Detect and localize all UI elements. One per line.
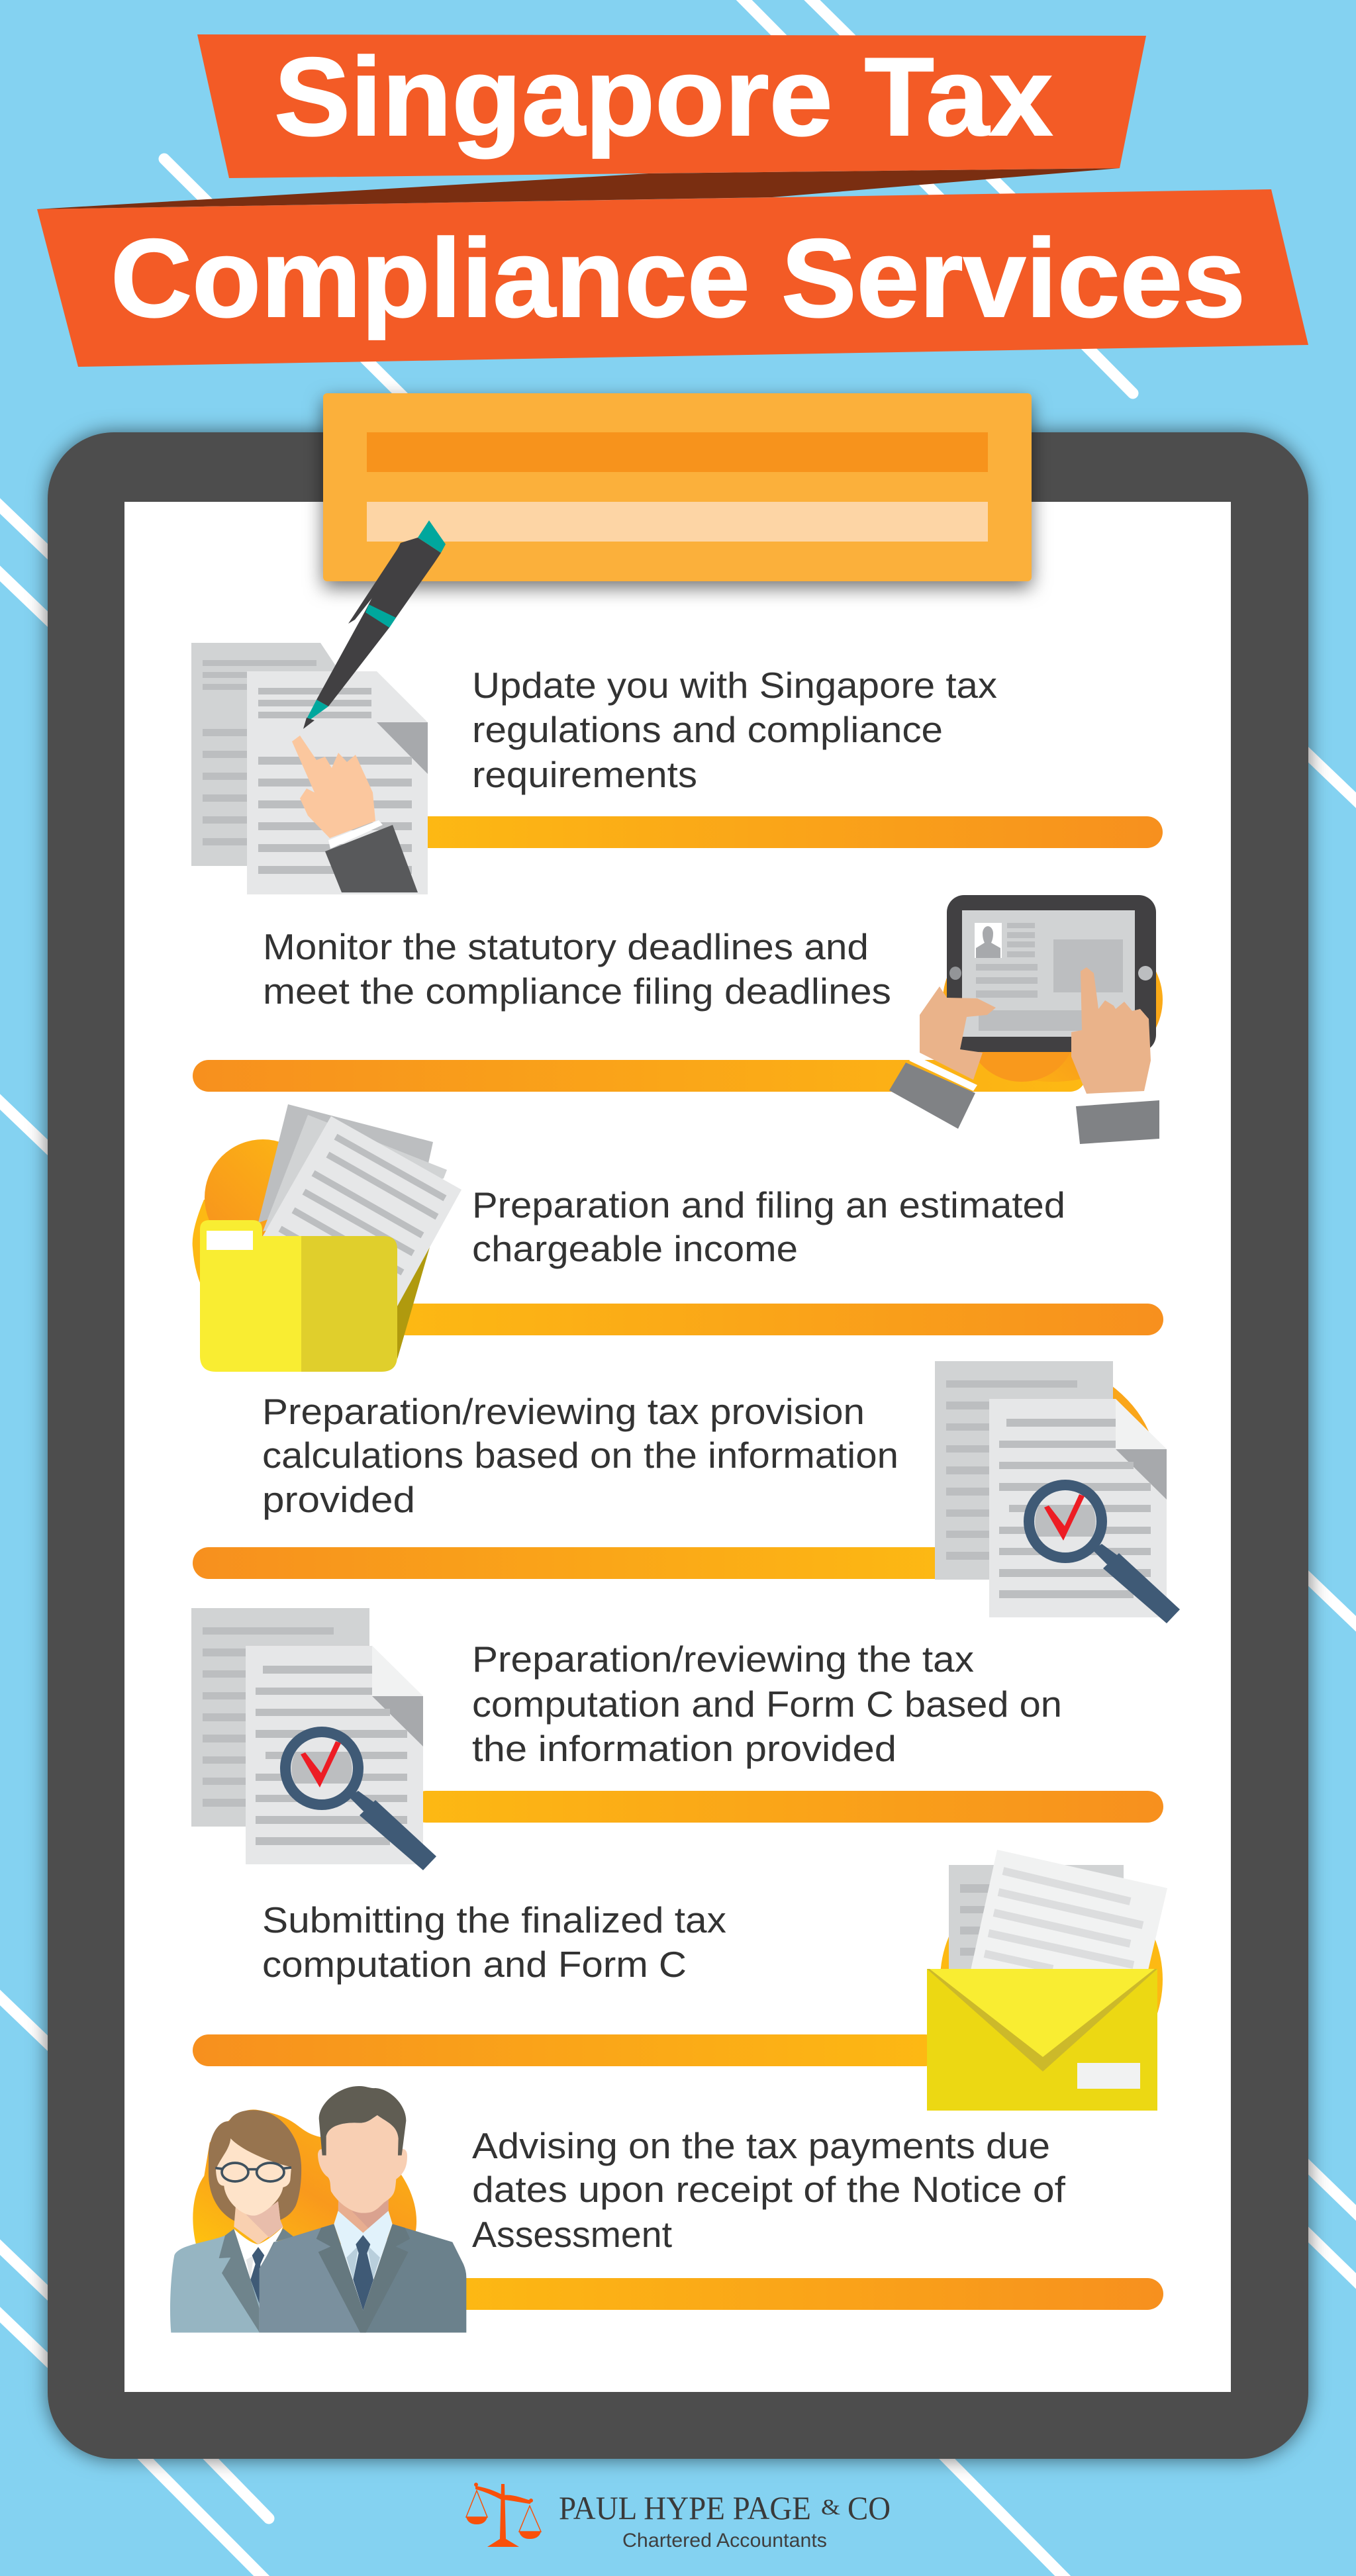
item 7 text: Assessment — [472, 2214, 672, 2255]
company name: PAUL HYPE PAGE — [559, 2489, 811, 2526]
clipboard paper — [124, 502, 1231, 2392]
item 5 bar — [411, 1791, 1163, 1823]
item 7 text: Advising on the tax payments due — [472, 2125, 1050, 2166]
clipboard clip — [323, 393, 1032, 581]
clip bar dark — [367, 432, 988, 472]
item 5 text: the information provided — [472, 1728, 896, 1769]
item 6 bar — [193, 2034, 941, 2066]
left hand — [889, 986, 996, 1129]
icon: tablet with hands — [889, 895, 1163, 1144]
icon: envelope with papers — [927, 1850, 1167, 2111]
item 1 bar — [411, 816, 1163, 848]
banner fold — [37, 168, 1120, 209]
logo — [466, 2483, 891, 2552]
company name suffix: CO — [848, 2489, 891, 2526]
item 2 text — [263, 926, 891, 1012]
item 1 — [191, 520, 1163, 894]
item 4 text — [262, 1391, 898, 1520]
item 1 text — [472, 665, 997, 795]
ampersand: & — [821, 2495, 840, 2520]
title banner — [37, 34, 1308, 367]
banner bottom — [37, 189, 1308, 367]
magnifier — [1029, 1485, 1180, 1623]
right hand — [1071, 967, 1159, 1144]
item 4 text: Preparation/reviewing tax provision — [262, 1391, 865, 1432]
icon: two business people — [170, 2086, 466, 2332]
item 5 text — [472, 1639, 1062, 1769]
icon: folder with papers — [193, 1104, 461, 1372]
title line 1: Singapore Tax — [274, 34, 1053, 159]
item 6 text: Submitting the finalized tax — [262, 1899, 726, 1940]
banner top — [197, 34, 1146, 178]
item 3 — [193, 1104, 1163, 1372]
item 7 text: dates upon receipt of the Notice of — [472, 2169, 1066, 2210]
item 2 text: Monitor the statutory deadlines and — [263, 926, 869, 967]
item 2 bar — [193, 1060, 1086, 1092]
item 5 — [191, 1608, 1163, 1870]
man — [260, 2086, 466, 2332]
item 6 text — [262, 1899, 726, 1985]
hand — [292, 736, 418, 892]
item 1 text: regulations and compliance — [472, 709, 943, 750]
item 1 text: Update you with Singapore tax — [472, 665, 997, 706]
item 5 text: computation and Form C based on — [472, 1684, 1062, 1725]
icon: scales — [466, 2483, 541, 2547]
item 4 bar — [193, 1547, 954, 1579]
icon: documents with magnifier — [935, 1361, 1180, 1623]
clipboard board — [48, 432, 1308, 2459]
item 6 text: computation and Form C — [262, 1944, 687, 1985]
woman — [170, 2110, 301, 2332]
item 3 text: chargeable income — [472, 1228, 798, 1269]
title line 2: Compliance Services — [111, 216, 1245, 340]
pen — [303, 520, 446, 729]
item 6 — [193, 1850, 1167, 2111]
item 4 — [193, 1361, 1180, 1623]
icon: documents with pen and hand — [191, 520, 446, 894]
clip bar light — [367, 502, 988, 542]
item 7 — [170, 2086, 1163, 2332]
item 4 text: calculations based on the information — [262, 1435, 898, 1476]
item 2 text: meet the compliance filing deadlines — [263, 971, 891, 1012]
item 7 bar — [450, 2278, 1163, 2310]
item 2 — [193, 895, 1163, 1144]
item 7 text — [472, 2125, 1066, 2255]
item 3 text: Preparation and filing an estimated — [472, 1184, 1065, 1225]
tagline: Chartered Accountants — [622, 2530, 827, 2552]
item 5 text: Preparation/reviewing the tax — [472, 1639, 974, 1680]
item 1 text: requirements — [472, 754, 697, 795]
item 3 text — [472, 1184, 1065, 1269]
icon: documents with magnifier — [191, 1608, 436, 1870]
item 4 text: provided — [262, 1479, 415, 1520]
magnifier — [285, 1732, 436, 1870]
item 3 bar — [391, 1304, 1163, 1335]
